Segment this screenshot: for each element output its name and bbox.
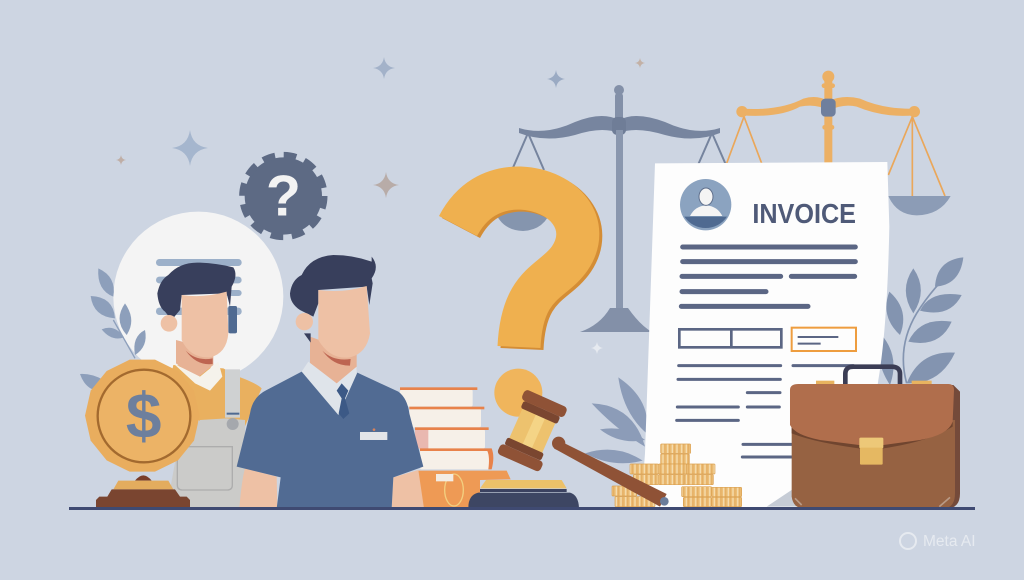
- sweater: [170, 365, 262, 430]
- icon: gear with question mark: [243, 155, 324, 237]
- paper fold: [767, 487, 797, 507]
- coin stacks: [612, 444, 742, 507]
- handle: [554, 439, 667, 507]
- person back: overalls worker: [80, 212, 283, 508]
- gold disc: [494, 369, 542, 417]
- smile: [186, 351, 213, 364]
- name tag: [360, 428, 387, 440]
- watermark: [900, 533, 976, 550]
- leaves behind the gavel: [585, 377, 647, 463]
- table box: [679, 329, 781, 347]
- face: [318, 286, 370, 358]
- shirt collar: [302, 362, 357, 415]
- leaf sprig left: [80, 268, 146, 391]
- ear: [296, 313, 313, 330]
- invoice paper: [640, 162, 889, 508]
- person front: man in blue vest: [237, 255, 424, 508]
- ground line: [69, 507, 975, 510]
- neck: [310, 337, 357, 385]
- dollar sign: $: [126, 379, 161, 451]
- books and cloth: [400, 387, 511, 507]
- white circle with blinds: [113, 212, 283, 382]
- watermark: Meta AI: [923, 533, 976, 550]
- overalls: [167, 369, 245, 508]
- coin trophy: [85, 360, 200, 508]
- neck: [176, 340, 213, 378]
- icon: gear with question mark: ?: [266, 165, 301, 229]
- tie: [337, 383, 349, 419]
- blue top: [237, 372, 423, 508]
- collar: [173, 362, 222, 391]
- orange cloth: [418, 471, 511, 507]
- invoice title: INVOICE: [752, 198, 856, 229]
- hair: [290, 255, 376, 343]
- sparkle stars: [116, 57, 645, 354]
- orange balance scale: [727, 71, 951, 215]
- gavel and sound block: [468, 369, 669, 508]
- book stack: [400, 387, 493, 469]
- ear: [161, 315, 177, 332]
- grey balance scale: [494, 85, 726, 332]
- invoice document: [640, 162, 889, 508]
- big question mark: [458, 188, 581, 349]
- hair: [157, 263, 235, 320]
- gavel head: [497, 389, 568, 472]
- avatar icon: [680, 179, 731, 230]
- arms: [239, 468, 277, 508]
- face: [182, 292, 228, 357]
- briefcase: [790, 367, 960, 508]
- smile: [322, 351, 351, 366]
- leaves behind the invoice, right: [879, 257, 963, 385]
- highlighted amount box: [792, 328, 856, 351]
- text lines: [677, 247, 855, 457]
- sound block: [468, 480, 579, 508]
